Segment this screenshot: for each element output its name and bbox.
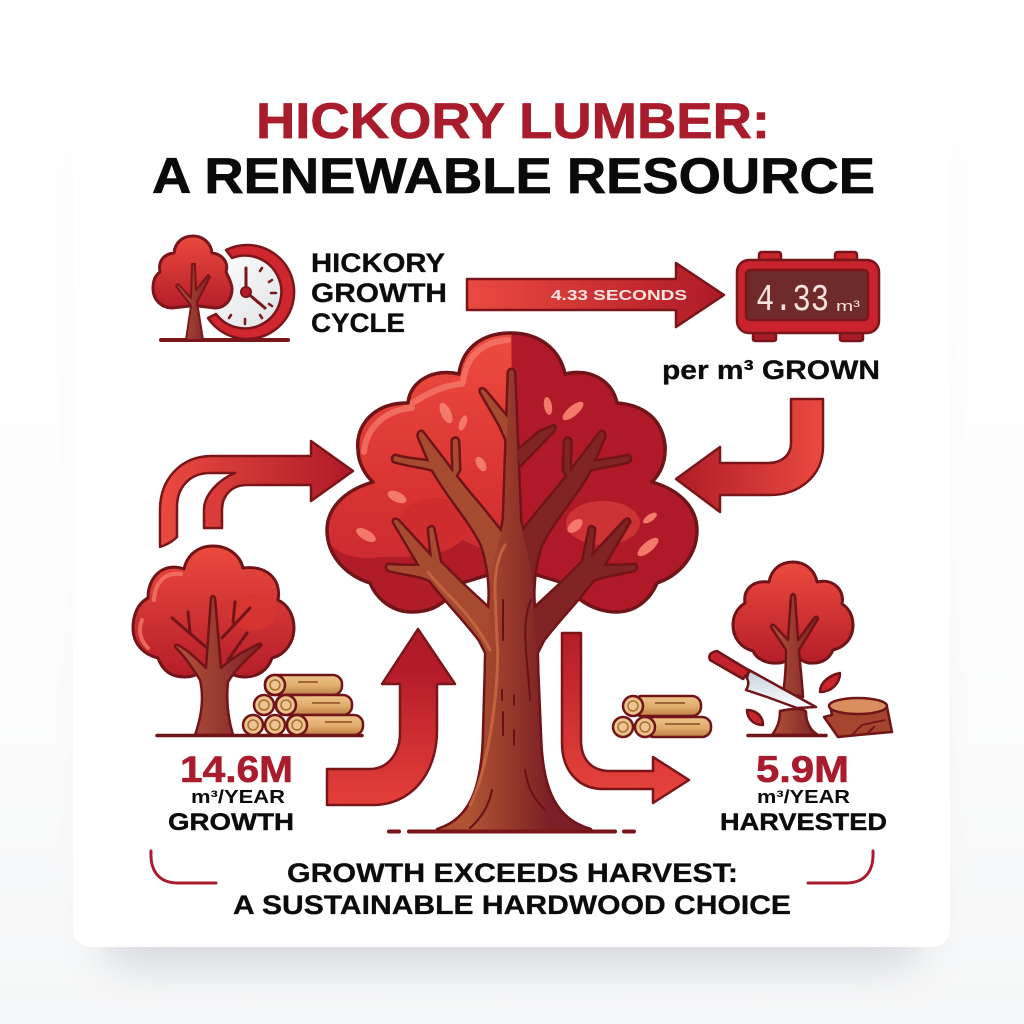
log grain: [655, 703, 700, 724]
trunk bark marks: [470, 600, 545, 828]
canopy highlight: [140, 574, 181, 648]
label: hickory growth cycle: [311, 248, 447, 338]
icon tree trunk: [176, 264, 210, 340]
icon tree canopy: [153, 236, 232, 308]
canopy left half: [328, 334, 512, 558]
clock centre: [241, 287, 251, 297]
falling leaf: [747, 710, 763, 725]
growing tree ground: [157, 734, 362, 737]
log rings: [248, 680, 302, 730]
icon: growing tree with logs: [133, 546, 363, 736]
arrow: growth up to main tree: [327, 629, 455, 805]
conclusion text: [233, 858, 791, 920]
bracket left: [151, 851, 216, 883]
icon: digital timer: [737, 252, 879, 341]
label: per m3 grown: per m³ GROWN: [662, 355, 880, 385]
felled stump top: [829, 698, 887, 714]
growing tree canopy: [133, 546, 294, 677]
growth label: GROWTH: [168, 809, 294, 836]
gaps under canopy: [463, 577, 560, 606]
timer buttons: [759, 252, 857, 260]
clock ground line: [161, 338, 288, 342]
upper left branch: [481, 389, 509, 445]
harvest label: HARVESTED: [720, 809, 887, 836]
icon: harvested logs: [613, 696, 711, 737]
upper right branch: [516, 426, 554, 465]
log pile: [243, 675, 363, 735]
trunk highlights: [428, 545, 505, 805]
bracket right: [808, 851, 873, 883]
canopy highlight: [364, 340, 508, 452]
right branches: [520, 432, 636, 660]
lower log: [645, 717, 711, 737]
title line 1: HICKORY LUMBER:: [256, 93, 770, 149]
canopy outline: [327, 333, 697, 612]
cut tree trunk: [771, 594, 818, 697]
falling leaf: [820, 673, 840, 692]
left branches: [387, 432, 503, 660]
timer body: [737, 260, 879, 333]
icon: tree being cut: [709, 562, 892, 737]
log ends: [243, 675, 307, 735]
middle log: [276, 695, 352, 715]
conclusion line 2: A SUSTAINABLE HARDWOOD CHOICE: [233, 890, 791, 920]
arrow: main tree to harvest: [562, 633, 689, 803]
knife handle: [709, 651, 750, 679]
felled stump: [824, 706, 892, 737]
cut tree canopy: [733, 562, 853, 663]
branches and trunk outline: [387, 370, 636, 830]
growing tree trunk and branches: [175, 596, 261, 735]
harvest unit: m³/YEAR: [757, 787, 850, 807]
bottom log: [287, 715, 363, 735]
conclusion line 1: GROWTH EXCEEDS HARVEST:: [287, 858, 738, 888]
canopy right half: [512, 334, 696, 610]
log grain: [298, 682, 352, 722]
title: [152, 93, 875, 204]
canopy shading: lower left lobe: [332, 540, 486, 610]
card panel: [73, 80, 950, 947]
canopy shade patch: [228, 594, 276, 630]
clock hands: [246, 268, 265, 308]
timer reading: 4.33: [756, 279, 829, 322]
title line 2: A RENEWABLE RESOURCE: [152, 148, 875, 204]
arrow: 4.33 seconds: [467, 263, 724, 327]
arrow label: 4.33 SECONDS: [551, 288, 687, 304]
clock ticks: [229, 268, 276, 324]
arrow shape: [467, 263, 724, 327]
knife blade: [746, 670, 816, 708]
clock ring: [208, 245, 294, 339]
label line: CYCLE: [311, 308, 405, 338]
thin upper branches: [172, 602, 250, 660]
arrow: seedling to main tree: [160, 441, 353, 547]
stump root marks: [852, 720, 885, 735]
label line: HICKORY: [311, 248, 445, 278]
ground line: [389, 830, 634, 834]
log rings: [618, 701, 650, 732]
clock face: [208, 255, 282, 329]
growth unit: m³/YEAR: [191, 787, 285, 807]
canopy accent right: [566, 501, 640, 545]
card shadow: [105, 150, 920, 965]
label line: GROWTH: [311, 278, 447, 308]
harvest value: 5.9M: [756, 749, 849, 790]
log ends: [613, 696, 655, 737]
canopy leaves: [354, 396, 661, 559]
upper log: [633, 696, 701, 716]
growth value: 14.6M: [180, 749, 293, 790]
arrow: grown volume to main tree: [676, 399, 823, 512]
icon: small tree with clock: [153, 236, 294, 340]
main tree: [322, 333, 697, 832]
timer unit: m³: [836, 298, 860, 315]
cut tree stump: [772, 709, 818, 735]
timer feet: [753, 332, 863, 341]
trunk: [438, 370, 590, 830]
timer screen: [746, 270, 868, 320]
cut tree ground: [748, 734, 826, 737]
stat: growth: [168, 749, 294, 836]
stat: harvested: [720, 749, 887, 836]
top log: [265, 675, 342, 695]
canopy accent left: [400, 498, 470, 546]
